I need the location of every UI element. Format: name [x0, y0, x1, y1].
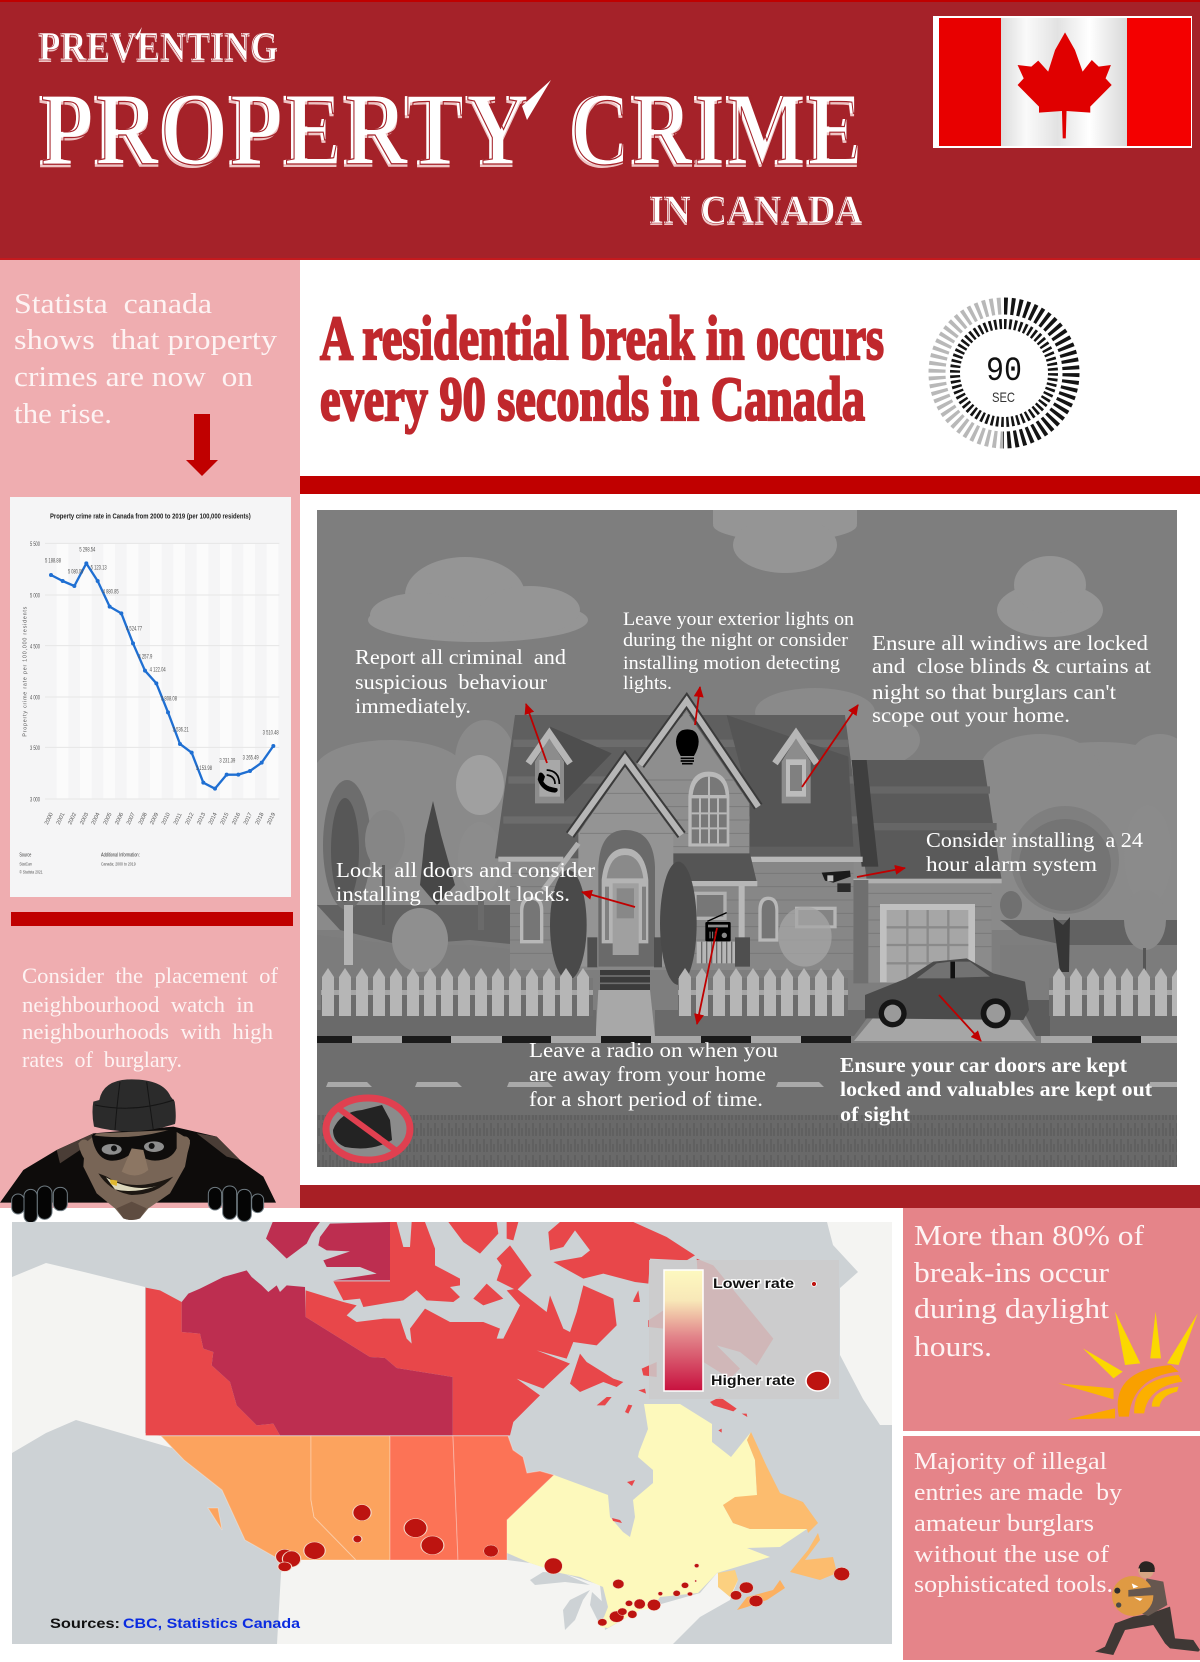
tip: report behaviour: immediately. [355, 694, 471, 718]
chart axis labels: 3 500 [30, 745, 40, 752]
chart year labels [44, 812, 277, 826]
sidebar statement: statista [14, 289, 277, 430]
chart year labels: 2015 [220, 812, 230, 826]
tip: windows: and close blinds & curtains at [872, 654, 1151, 678]
panel: daylight statistic [903, 1208, 1200, 1431]
lower red band [300, 1185, 1200, 1208]
tip: doors [336, 858, 595, 906]
icon: light bulb [676, 729, 699, 764]
legend [649, 1260, 839, 1399]
chart year labels: 2000 [44, 812, 55, 826]
tip: exterior lights: Leave your exterior lights on [623, 609, 855, 630]
house illustration [495, 701, 1002, 1036]
legend label: lower rate: Lower rate [713, 1275, 794, 1291]
tip: exterior lights: lights. [623, 673, 672, 694]
tip: car doors [840, 1053, 1152, 1126]
chart year labels: 2011 [173, 812, 184, 826]
chart value labels: 5 188.88 [45, 558, 61, 565]
tip: radio: are away from your home [529, 1062, 766, 1086]
western provinces [161, 1436, 554, 1560]
map sources [50, 1615, 300, 1631]
title: in canada: IN CANADA [650, 187, 863, 232]
line chart: property crime rate [10, 497, 291, 897]
chart source notes: StatCan [19, 861, 32, 867]
title: in canada: IN CANADA [649, 187, 862, 232]
chart value labels: 3 265.49 [243, 754, 259, 761]
car [865, 958, 1029, 1028]
chart value labels: 3 510.48 [263, 730, 279, 737]
tip: report behaviour: Report all criminal and [355, 645, 567, 669]
tip: alarm system [926, 828, 1144, 876]
sidebar statement: statista: Statista canada [14, 289, 213, 320]
tip: car doors: of sight [840, 1102, 910, 1126]
arrow down to chart [186, 414, 218, 476]
tip: radio: for a short period of time. [529, 1087, 763, 1111]
tip: alarm system: hour alarm system [926, 852, 1097, 876]
title: preventing: PREVENTING [39, 23, 279, 69]
chart source notes: Source [19, 853, 31, 859]
chart year labels: 2002 [67, 812, 78, 826]
chart value labels [45, 546, 279, 772]
chart year labels: 2019 [266, 812, 277, 826]
chart axis labels: 3 000 [30, 797, 40, 804]
chart year labels: 2003 [79, 812, 90, 826]
chart value labels: 5 123.13 [91, 564, 107, 571]
chart axis labels: 5 500 [30, 541, 40, 548]
tip: radio [529, 1038, 779, 1111]
chart year labels: 2013 [196, 812, 207, 826]
map: crime rates across Canada [12, 1222, 892, 1644]
tip: doors: Lock all doors and consider [336, 858, 595, 882]
title: property crime: PROPERTY [38, 75, 528, 190]
headline: break-in frequency: every 90 seconds in Canada [320, 366, 865, 434]
chart year labels: 2007 [126, 812, 137, 826]
daylight text: More than 80% of [914, 1221, 1145, 1252]
icon: security camera [822, 871, 851, 892]
chart year labels: 2017 [243, 812, 254, 826]
chart year labels: 2012 [185, 812, 195, 826]
great lakes [530, 1572, 608, 1630]
chart line [49, 561, 275, 791]
daylight text: break-ins occur [914, 1258, 1110, 1289]
amateur burglars text: amateur burglars [914, 1511, 1094, 1537]
sidebar statement: neighbourhood watch: rates of burglary. [22, 1047, 182, 1072]
chart axis labels: 4 500 [30, 643, 40, 650]
sidebar divider bar [11, 912, 293, 926]
tip: doors: installing deadbolt locks. [336, 882, 570, 906]
icon: 90 second timer: SEC [992, 389, 1015, 405]
chart year labels: 2004 [91, 812, 101, 826]
chart value labels: 3 231.39 [219, 758, 236, 765]
eastern provinces [507, 1404, 837, 1628]
tip: windows: Ensure all windiws are locked [872, 631, 1149, 655]
chart source notes [19, 853, 140, 876]
tip: alarm system: Consider installing a 24 [926, 828, 1144, 852]
tip: windows [872, 631, 1151, 727]
tip: exterior lights [623, 609, 855, 694]
chart value labels: 3 536.21 [173, 727, 189, 734]
title: preventing: PREVENTING [38, 25, 278, 71]
sidebar statement: statista: the rise. [14, 399, 112, 430]
tip: radio: Leave a radio on when you [529, 1038, 779, 1062]
panel: amateur burglars [903, 1436, 1200, 1660]
amateur burglars text: entries are made by [914, 1480, 1122, 1506]
chart value labels: 4 122.04 [150, 667, 166, 674]
icon: no burglar sign [326, 1098, 410, 1160]
icon: radio [705, 913, 731, 941]
chart source notes: Canada; 2000 to 2019 [101, 861, 136, 867]
tip: report behaviour [355, 645, 567, 718]
title: in canada: IN CANADA [649, 189, 862, 234]
chart value labels: 3 808.08 [161, 696, 177, 703]
left sidebar panel [0, 260, 300, 1223]
northern territories [146, 1222, 623, 1435]
chart value labels: 5 080.09 [68, 569, 84, 576]
icon: phone [538, 770, 559, 793]
amateur burglars text: Majority of illegal [914, 1449, 1107, 1475]
title: property crime: CRIME [568, 75, 862, 190]
chart year labels: 2006 [114, 812, 125, 826]
daylight text: hours. [914, 1332, 992, 1363]
amateur burglars text [914, 1449, 1122, 1598]
chart source notes: © Statista 2021 [19, 869, 43, 876]
sidebar statement: neighbourhood watch [22, 963, 279, 1072]
rate markers [276, 1505, 850, 1626]
tip: exterior lights: installing motion detecting [623, 653, 841, 674]
map sources: Sources: [50, 1615, 120, 1631]
tip: report behaviour: suspicious behaviour [355, 670, 547, 694]
eastern arctic islands [548, 1222, 773, 1433]
sidebar statement: neighbourhood watch: Consider the placement of [22, 963, 279, 988]
sidebar statement: statista: crimes are now on [14, 362, 253, 393]
chart source notes: Additional Information: [101, 853, 140, 859]
tip: windows: scope out your home. [872, 703, 1070, 727]
chart value labels: 4 880.85 [103, 588, 119, 595]
title: property crime: CRIME [571, 72, 865, 187]
chart axis labels: 4 000 [30, 694, 40, 701]
headline: break-in frequency: A residential break in occurs [320, 305, 884, 373]
header banner [0, 0, 1200, 260]
map sources: CBC, Statistics Canada [123, 1615, 300, 1631]
chart year labels: 2008 [138, 812, 149, 826]
chart year labels: 2001 [56, 812, 66, 826]
background hills and clouds [315, 509, 1190, 1005]
chart year labels: 2014 [208, 812, 219, 826]
tip: car doors: locked and valuables are kept out [840, 1077, 1152, 1101]
tip: windows: night so that burglars can't [872, 680, 1116, 704]
chart value labels: 4 257.9 [138, 653, 153, 660]
chart axis labels: Property crime rate per 100,000 residents [23, 606, 29, 737]
grass strip and fences [317, 968, 1177, 1041]
sidebar statement: statista: shows that property [14, 325, 277, 356]
icon: 90 second timer: 90 [986, 353, 1022, 391]
burglar illustration [0, 1079, 276, 1223]
chart year labels: 2005 [103, 812, 113, 826]
icon: sun [1058, 1312, 1198, 1419]
chart year labels: 2009 [149, 812, 160, 826]
tip: exterior lights: during the night or consider [623, 630, 849, 651]
panel: house safety scene [315, 509, 1190, 1167]
chart year labels: 2016 [231, 812, 242, 826]
title: property crime: PROPERTY [38, 72, 528, 187]
amateur burglars text: without the use of [914, 1542, 1109, 1568]
sidebar statement: neighbourhood watch: neighbourhood watch in [22, 992, 254, 1017]
chart value labels: 5 298.54 [79, 546, 96, 553]
chart value labels: 4 524.77 [126, 626, 142, 633]
title: preventing: PREVENTING [38, 23, 278, 69]
daylight text: during daylight [914, 1294, 1109, 1325]
icon: running thief with sack [1095, 1561, 1200, 1655]
headline: break-in frequency [320, 305, 884, 434]
title: property crime: CRIME [568, 72, 862, 187]
amateur burglars text: sophisticated tools. [914, 1572, 1113, 1598]
chart value labels: 3 153.98 [196, 765, 212, 772]
chart year labels: 2018 [255, 812, 265, 826]
chart year labels: 2010 [161, 812, 172, 826]
canadian flag [933, 16, 1192, 148]
top red band [300, 476, 1200, 494]
daylight text [914, 1221, 1145, 1363]
surrounding land [12, 1222, 892, 1644]
icon: 90 second timer [937, 306, 1071, 440]
title: property crime [38, 72, 865, 190]
sidebar statement: neighbourhood watch: neighbourhoods with high [22, 1019, 273, 1044]
tip: car doors: Ensure your car doors are kept [840, 1053, 1127, 1077]
legend label: higher rate: Higher rate [711, 1372, 795, 1388]
road [317, 1036, 1177, 1167]
chart title: Property crime rate in Canada from 2000 to 2019 (per 100,000 residents) [50, 511, 251, 520]
arrows to tips [526, 687, 981, 1041]
title: property crime: PROPERTY [41, 72, 531, 187]
chart axis labels: 5 000 [30, 592, 40, 599]
chart axis labels [23, 541, 40, 804]
